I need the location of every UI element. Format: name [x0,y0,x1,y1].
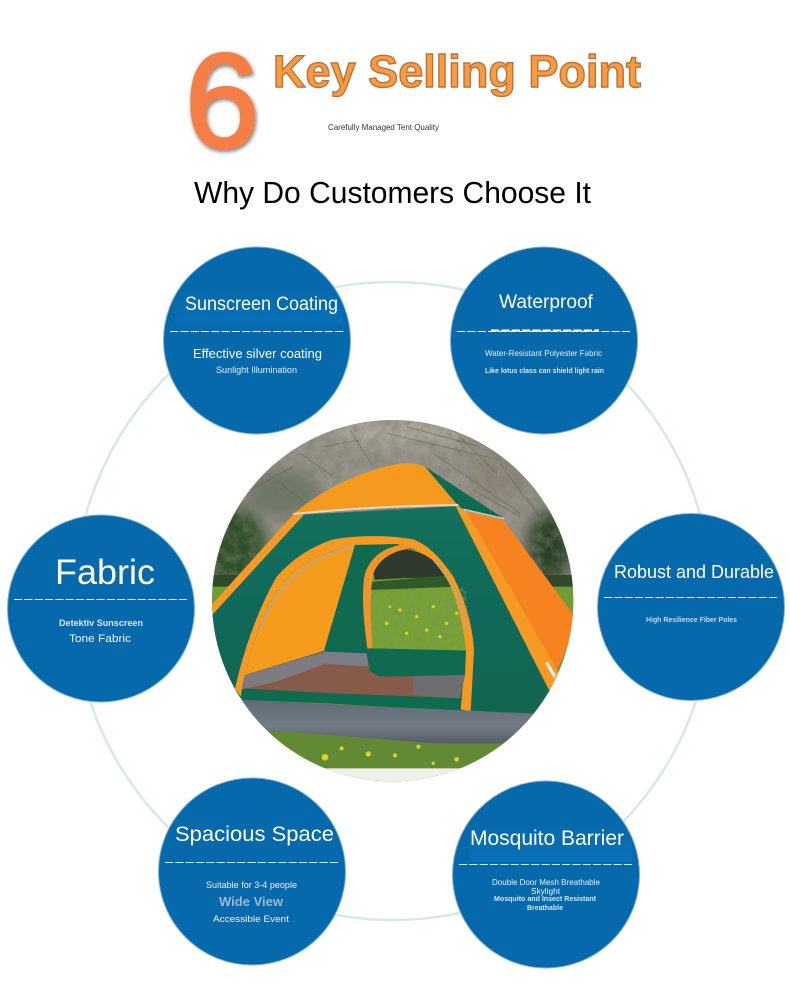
circle: Mosquito Barrier: Breathable [527,905,563,912]
door arch trim [235,536,474,712]
circle: Mosquito Barrier: Mosquito and Insect Resistant [494,896,597,903]
circle: Robust and Durable [598,514,784,700]
circle: Spacious Space: Accessible Event [213,914,289,925]
circle: Robust and Durable: Robust and Durable [614,562,774,582]
circle: Mosquito Barrier: Mosquito Barrier [470,827,624,850]
main green body [207,506,558,718]
circle: Waterproof: Water-Resistant Polyester Fabric [485,348,603,358]
groundsheet [230,699,543,744]
big orange number 6: 6 [185,27,260,176]
inner green wall [324,543,400,651]
circle: Fabric: Detektiv Sunscreen [59,618,143,628]
inner door trim [363,545,415,648]
stripes [455,505,560,692]
circle: Robust and Durable: High Resilience Fiber Poles [646,617,737,624]
title block [185,27,641,176]
rear green panel [425,467,504,519]
doorway view [367,548,467,651]
floor [242,652,465,698]
circle: Spacious Space: Wide View [219,895,283,909]
circle: Sunscreen Coating: Sunscreen Coating [185,294,338,315]
right orange panel [465,511,575,678]
section heading: Why Do Customers Choose It [194,175,591,210]
circle: Waterproof: Waterproof [499,292,594,313]
door inner left panel [245,545,355,675]
circle: Sunscreen Coating: Effective silver coating [193,346,322,361]
trees background [212,420,574,782]
hedge and lawn [200,575,585,588]
circle: Waterproof [450,247,638,434]
connecting ring [74,282,712,920]
subheading: tent quality: Carefully Managed Tent Quality [328,122,440,132]
circle: Sunscreen Coating: Sunlight Illumination [216,365,297,375]
circle: Sunscreen Coating [164,247,350,434]
circle: Mosquito Barrier [452,781,640,968]
circle: Spacious Space: Suitable for 3-4 people [206,880,297,890]
circle: Fabric [8,515,194,702]
circle: Mosquito Barrier: Double Door Mesh Breathable [492,877,600,887]
pale base of the photo [325,768,460,782]
circle: Fabric: Tone Fabric [69,633,132,645]
circle: Fabric: Fabric [55,553,155,592]
rear sill [368,648,466,677]
heading: Key Selling Point: Key Selling Point [273,46,641,97]
circle: Mosquito Barrier: Skylight [531,886,561,896]
circle: Spacious Space: Spacious Space [175,823,334,846]
circle: Waterproof: Like lotus class can shield light rain [485,366,604,375]
central tent photo [212,420,574,782]
circle: Spacious Space [158,778,346,965]
tent roof [293,463,458,514]
foreground lawn [257,729,510,768]
front sill [242,690,460,704]
